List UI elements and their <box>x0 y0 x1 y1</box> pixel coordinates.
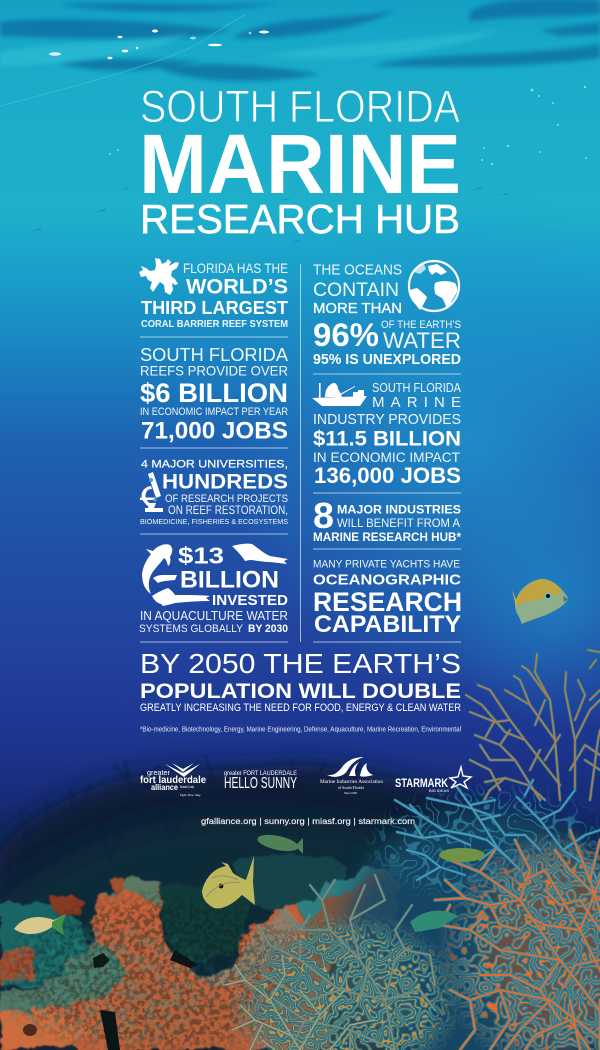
logo: hello sunny: HELLO SUNNY <box>224 775 297 792</box>
logo: starmark: BIG IDEAS <box>429 788 449 793</box>
logo: greater fort lauderdale alliance: Broward County <box>180 785 194 789</box>
panel: universities <box>140 458 288 526</box>
orange sponges <box>0 854 401 1050</box>
logo: greater fort lauderdale alliance: Fight. Dine. Stay. <box>180 793 201 797</box>
panel: oceans: WATER <box>383 328 461 353</box>
panel: yachts: CAPABILITY <box>314 611 461 638</box>
panel: marine industry: IN ECONOMIC IMPACT <box>313 450 460 465</box>
logo: marine industries association: of South Florida <box>338 785 364 790</box>
logo: marine industries association <box>320 757 383 795</box>
panel: major industries: MAJOR INDUSTRIES <box>337 502 461 516</box>
panel: aquaculture: INVESTED <box>212 592 288 609</box>
panel: universities: HUNDREDS <box>162 470 288 494</box>
footnote: *Bio-medicine, Biotechnology, Energy, Marine Engineering, Defense, Aquaculture, Marine Recreation, Environmental <box>140 726 461 734</box>
logo: starmark: STARMARK <box>395 776 448 790</box>
swimming fish <box>512 579 568 624</box>
panel: aquaculture: BILLION <box>180 566 279 594</box>
logo: greater fort lauderdale alliance: alliance <box>151 783 178 792</box>
panel: coral reef: FLORIDA HAS THE <box>183 260 288 276</box>
icon: fishing boat <box>312 383 367 406</box>
panel: marine industry: 136,000 JOBS <box>314 463 461 488</box>
panel: aquaculture: BY 2030 <box>248 623 288 635</box>
icon: fish silhouettes <box>142 544 288 606</box>
panel: oceans: OF THE EARTH’S <box>381 319 461 331</box>
logo: marine industries association: Marine Industries Association <box>320 779 383 785</box>
icon: globe <box>409 261 459 311</box>
fan coral underlay <box>265 810 600 1050</box>
dark fish <box>93 953 110 968</box>
panel: reef economics <box>140 345 288 444</box>
fan coral branches <box>225 650 600 1050</box>
panel: oceans: 96% <box>313 317 379 353</box>
panel: reef economics: IN ECONOMIC IMPACT PER YEAR <box>140 406 288 418</box>
green fish <box>256 832 303 854</box>
population statement <box>140 648 461 714</box>
green reef patches <box>0 853 345 985</box>
small striped fish <box>14 914 66 935</box>
panel: oceans <box>313 261 461 368</box>
panel: major industries <box>313 495 461 544</box>
panel: universities: OF RESEARCH PROJECTS <box>165 493 288 505</box>
panel: yachts: RESEARCH <box>313 587 462 617</box>
panel: aquaculture <box>139 542 288 635</box>
panel: oceans: MORE THAN <box>313 300 402 317</box>
panel: universities: ON REEF RESTORATION, <box>168 505 288 517</box>
website links: gfalliance.org | sunny.org | miasf.org | starmark.com <box>201 816 415 826</box>
logo: hello sunny: greater FORT LAUDERDALE <box>224 770 298 777</box>
panel: reef economics: 71,000 JOBS <box>141 418 288 444</box>
panel: marine industry <box>312 381 462 488</box>
panel: reef economics: $6 BILLION <box>140 378 288 408</box>
dark sponge holes <box>23 950 198 1050</box>
panel: universities: 4 MAJOR UNIVERSITIES, <box>141 458 288 470</box>
logo: greater fort lauderdale alliance: fort lauderdale <box>140 774 206 786</box>
panel: aquaculture: SYSTEMS GLOBALLY <box>139 623 244 635</box>
panel: marine industry: MARINE <box>372 394 461 411</box>
column dividers <box>140 264 461 642</box>
panel: reef economics: SOUTH FLORIDA <box>140 345 288 365</box>
panel: yachts <box>313 558 462 638</box>
panel: yachts: OCEANOGRAPHIC <box>313 572 461 588</box>
panel: oceans: 95% IS UNEXPLORED <box>313 351 461 368</box>
surface waves and sparkles <box>0 0 600 242</box>
panel: aquaculture: IN AQUACULTURE WATER <box>140 608 288 623</box>
panel: major industries: 8 <box>313 495 334 536</box>
panel: coral reef: CORAL BARRIER REEF SYSTEM <box>141 318 288 330</box>
panel: major industries: MARINE RESEARCH HUB* <box>313 530 461 544</box>
dark reef backdrop <box>0 755 600 1050</box>
population statement: POPULATION WILL DOUBLE <box>140 680 461 703</box>
population statement: GREATLY INCREASING THE NEED FOR FOOD, ENERGY & CLEAN WATER <box>140 702 461 714</box>
title: MARINE <box>139 117 461 211</box>
title: RESEARCH HUB <box>140 196 460 242</box>
panel: universities: BIOMEDICINE, FISHERIES & ECOSYSTEMS <box>140 517 288 526</box>
population statement: BY 2050 THE EARTH’S <box>140 648 461 679</box>
panel: aquaculture: $13 <box>178 542 224 568</box>
panel: marine industry: $11.5 BILLION <box>313 428 461 450</box>
panel: coral reef: THIRD LARGEST <box>141 298 288 318</box>
panel: oceans: CONTAIN <box>313 280 399 301</box>
logo: greater fort lauderdale alliance <box>140 763 206 797</box>
fish behind fan <box>410 848 485 932</box>
panel: marine industry: SOUTH FLORIDA <box>372 381 462 395</box>
logo: hello sunny <box>224 770 298 792</box>
panel: coral reef: WORLD’S <box>186 276 288 298</box>
panel: major industries: WILL BENEFIT FROM A <box>337 518 460 530</box>
panel: marine industry: INDUSTRY PROVIDES <box>313 411 461 428</box>
panel: yachts: MANY PRIVATE YACHTS HAVE <box>313 558 460 570</box>
yellow grunt fish <box>202 856 255 908</box>
logo: starmark <box>395 767 471 793</box>
logo: marine industries association: Since 1982 <box>344 791 357 795</box>
title: SOUTH FLORIDA <box>140 81 460 132</box>
fan coral mesh <box>225 780 600 1050</box>
icon: coral <box>139 258 179 295</box>
panel: coral reef <box>139 258 288 330</box>
panel: oceans: THE OCEANS <box>313 262 402 278</box>
title <box>139 81 461 242</box>
logo: greater fort lauderdale alliance: greater <box>147 770 171 777</box>
reef scene <box>0 650 600 1050</box>
icon: microscope <box>140 472 163 512</box>
panel: reef economics: REEFS PROVIDE OVER <box>140 362 288 378</box>
